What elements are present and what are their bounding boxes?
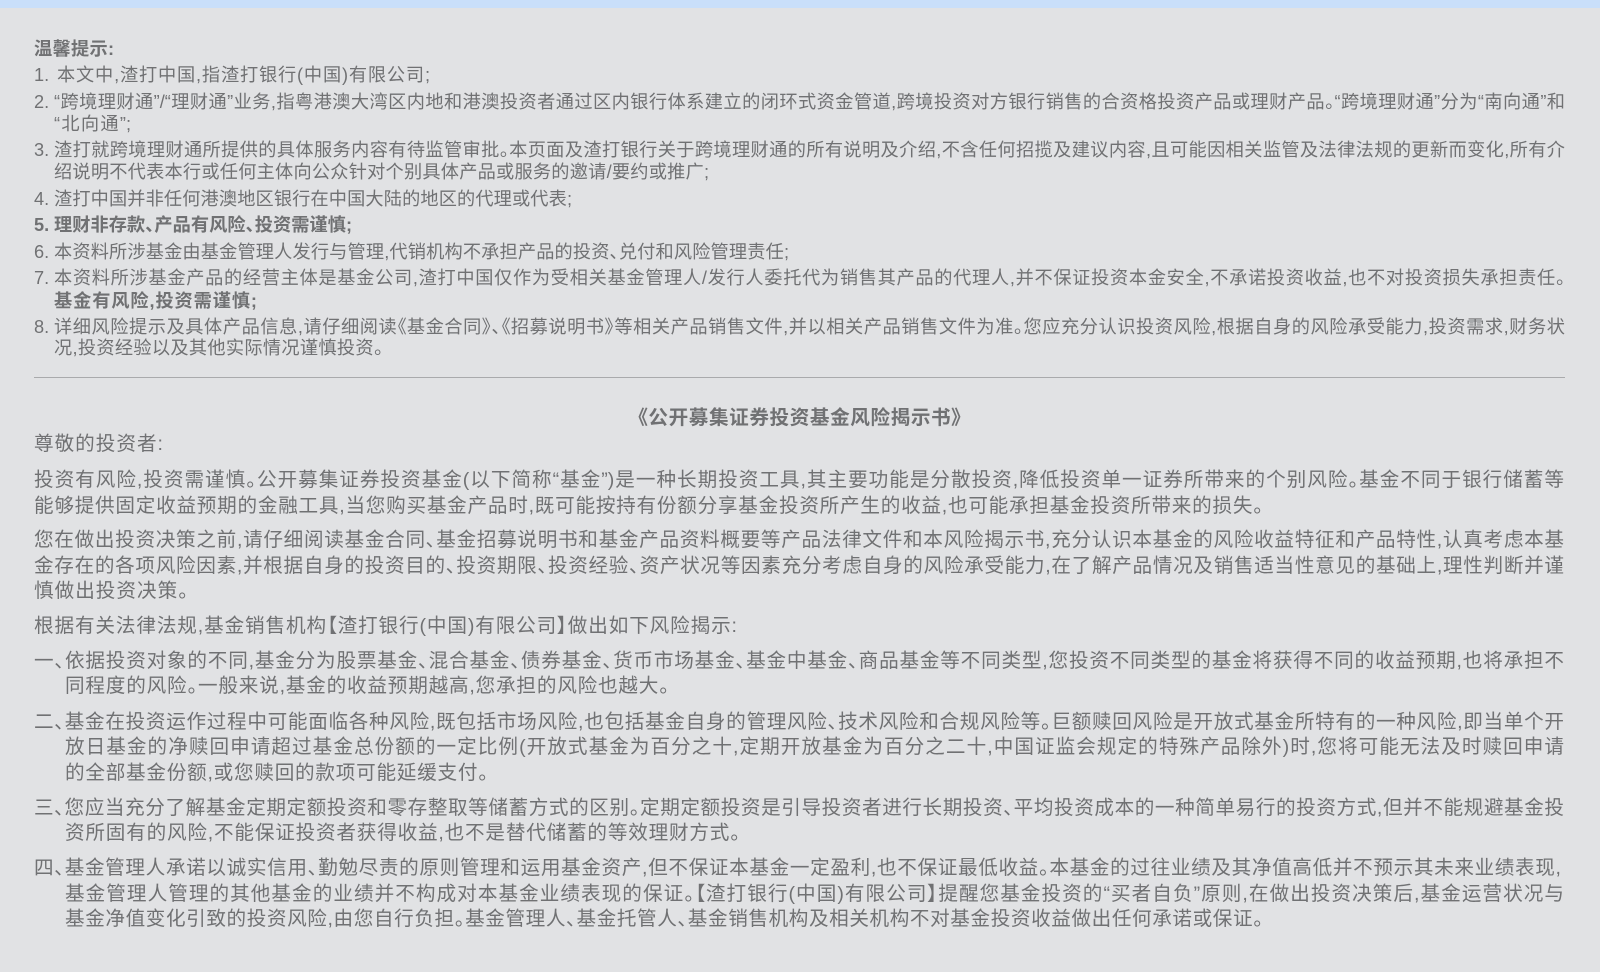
panel: risk disclosure bbox=[34, 407, 1564, 930]
risk item 4: 四、基金管理人承诺以诚实信用、勤勉尽责的原则管理和运用基金资产,但不保证本基金一定盈利,也不保证最低收益。本基金的过往业绩及其净值高低并不预示其未来业绩表现, bbox=[34, 857, 1561, 879]
note 3: 3. bbox=[34, 140, 49, 160]
note 3: 绍说明不代表本行或任何主体向公众针对个别具体产品或服务的邀请/要约或推广; bbox=[54, 162, 709, 182]
salutation: 尊敬的投资者: bbox=[34, 433, 163, 455]
note 8: 况,投资经验以及其他实际情况谨慎投资。 bbox=[54, 338, 383, 358]
paragraph: before investing: 慎做出投资决策。 bbox=[34, 580, 188, 602]
risk item 4: 基金管理人管理的其他基金的业绩并不构成对本基金业绩表现的保证。【渣打银行(中国)有限公司】提醒您基金投资的“买者自负”原则,在做出投资决策后,基金运营状况与 bbox=[65, 883, 1564, 905]
note 7: 本资料所涉基金产品的经营主体是基金公司,渣打中国仅作为受相关基金管理人/发行人委托代为销售其产品的代理人,并不保证投资本金安全,不承诺投资收益,也不对投资损失承担责任。 bbox=[54, 268, 1565, 288]
note 4: 4. bbox=[34, 189, 49, 209]
note 1: 1. bbox=[34, 65, 49, 85]
note 2: 2. bbox=[34, 92, 49, 112]
note 2 bbox=[34, 92, 1565, 134]
paragraph: intro bbox=[34, 469, 1564, 517]
note 2: “北向通”; bbox=[54, 114, 131, 134]
note 6: 6. bbox=[34, 242, 49, 262]
panel: reminder notes bbox=[34, 39, 1565, 358]
note 4: 渣打中国并非任何港澳地区银行在中国大陆的地区的代理或代表; bbox=[54, 189, 572, 209]
risk item 1 bbox=[34, 650, 1564, 697]
risk item 3: 三、您应当充分了解基金定期定额投资和零存整取等储蓄方式的区别。定期定额投资是引导投资者进行长期投资、平均投资成本的一种简单易行的投资方式,但并不能规避基金投 bbox=[34, 797, 1564, 819]
risk item 4 bbox=[34, 857, 1564, 930]
note 8 bbox=[34, 317, 1565, 358]
note 2: “跨境理财通”/“理财通”业务,指粤港澳大湾区内地和港澳投资者通过区内银行体系建立的闭环式资金管道,跨境投资对方银行销售的合资格投资产品或理财产品。“跨境理财通”分为“南向通”和 bbox=[54, 92, 1565, 112]
heading: risk disclosure title: 《公开募集证券投资基金风险揭示书》 bbox=[638, 407, 961, 429]
paragraph: before investing bbox=[34, 529, 1564, 602]
heading: reminder: 温馨提示: bbox=[34, 39, 114, 59]
note 5 (bold): 理财非存款、产品有风险、投资需谨慎; bbox=[54, 215, 352, 235]
risk item 2 bbox=[34, 711, 1564, 784]
note 8: 详细风险提示及具体产品信息,请仔细阅读《基金合同》、《招募说明书》等相关产品销售文件,并以相关产品销售文件为准。您应充分认识投资风险,根据自身的风险承受能力,投资需求,财务状 bbox=[54, 317, 1565, 337]
note 3: 渣打就跨境理财通所提供的具体服务内容有待监管审批。本页面及渣打银行关于跨境理财通的所有说明及介绍,不含任何招揽及建议内容,且可能因相关监管及法律法规的更新而变化,所有介 bbox=[54, 140, 1565, 160]
risk item 1: 一、依据投资对象的不同,基金分为股票基金、混合基金、债券基金、货币市场基金、基金中基金、商品基金等不同类型,您投资不同类型的基金将获得不同的收益预期,也将承担不 bbox=[34, 650, 1564, 672]
paragraph: legal basis: 根据有关法律法规,基金销售机构【渣打银行(中国)有限公司】做出如下风险揭示: bbox=[34, 615, 737, 637]
note 3 bbox=[34, 140, 1565, 182]
paragraph: intro: 能够提供固定收益预期的金融工具,当您购买基金产品时,既可能按持有份额分享基金投资所产生的收益,也可能承担基金投资所带来的损失。 bbox=[34, 495, 1263, 517]
top accent strip bbox=[0, 0, 1600, 8]
risk item 2: 的全部基金份额,或您赎回的款项可能延缓支付。 bbox=[65, 762, 488, 784]
risk item 4: 基金净值变化引致的投资风险,由您自行负担。基金管理人、基金托管人、基金销售机构及相关机构不对基金投资收益做出任何承诺或保证。 bbox=[65, 908, 1263, 930]
risk item 1: 同程度的风险。一般来说,基金的收益预期越高,您承担的风险也越大。 bbox=[65, 675, 669, 697]
note 6: 本资料所涉基金由基金管理人发行与管理,代销机构不承担产品的投资、兑付和风险管理责任; bbox=[54, 242, 789, 262]
note 5 (bold): 5. bbox=[34, 215, 49, 235]
paragraph: before investing: 金存在的各项风险因素,并根据自身的投资目的、投资期限、投资经验、资产状况等因素充分考虑自身的风险承受能力,在了解产品情况及销售适当性意见的基础上,理性判断并谨 bbox=[34, 555, 1564, 577]
risk item 3 bbox=[34, 797, 1564, 844]
risk item 2: 二、基金在投资运作过程中可能面临各种风险,既包括市场风险,也包括基金自身的管理风险、技术风险和合规风险等。巨额赎回风险是开放式基金所特有的一种风险,即当单个开 bbox=[34, 711, 1564, 733]
paragraph: intro: 投资有风险,投资需谨慎。公开募集证券投资基金(以下简称“基金”)是一种长期投资工具,其主要功能是分散投资,降低投资单一证券所带来的个别风险。基金不同于银行储蓄等 bbox=[34, 469, 1564, 491]
risk item 3: 资所固有的风险,不能保证投资者获得收益,也不是替代储蓄的等效理财方式。 bbox=[65, 822, 740, 844]
note 8: 8. bbox=[34, 317, 49, 337]
paragraph: before investing: 您在做出投资决策之前,请仔细阅读基金合同、基金招募说明书和基金产品资料概要等产品法律文件和本风险揭示书,充分认识本基金的风险收益特征和产品特性,认真考虑本基 bbox=[34, 529, 1564, 551]
note 7: 7. bbox=[34, 268, 49, 288]
note 7: 基金有风险,投资需谨慎; bbox=[54, 291, 257, 311]
risk item 2: 放日基金的净赎回申请超过基金总份额的一定比例(开放式基金为百分之十,定期开放基金为百分之二十,中国证监会规定的特殊产品除外)时,您将可能无法及时赎回申请 bbox=[65, 736, 1564, 758]
note 7 bbox=[34, 268, 1565, 311]
note 1: 本文中,渣打中国,指渣打银行(中国)有限公司; bbox=[57, 65, 430, 85]
